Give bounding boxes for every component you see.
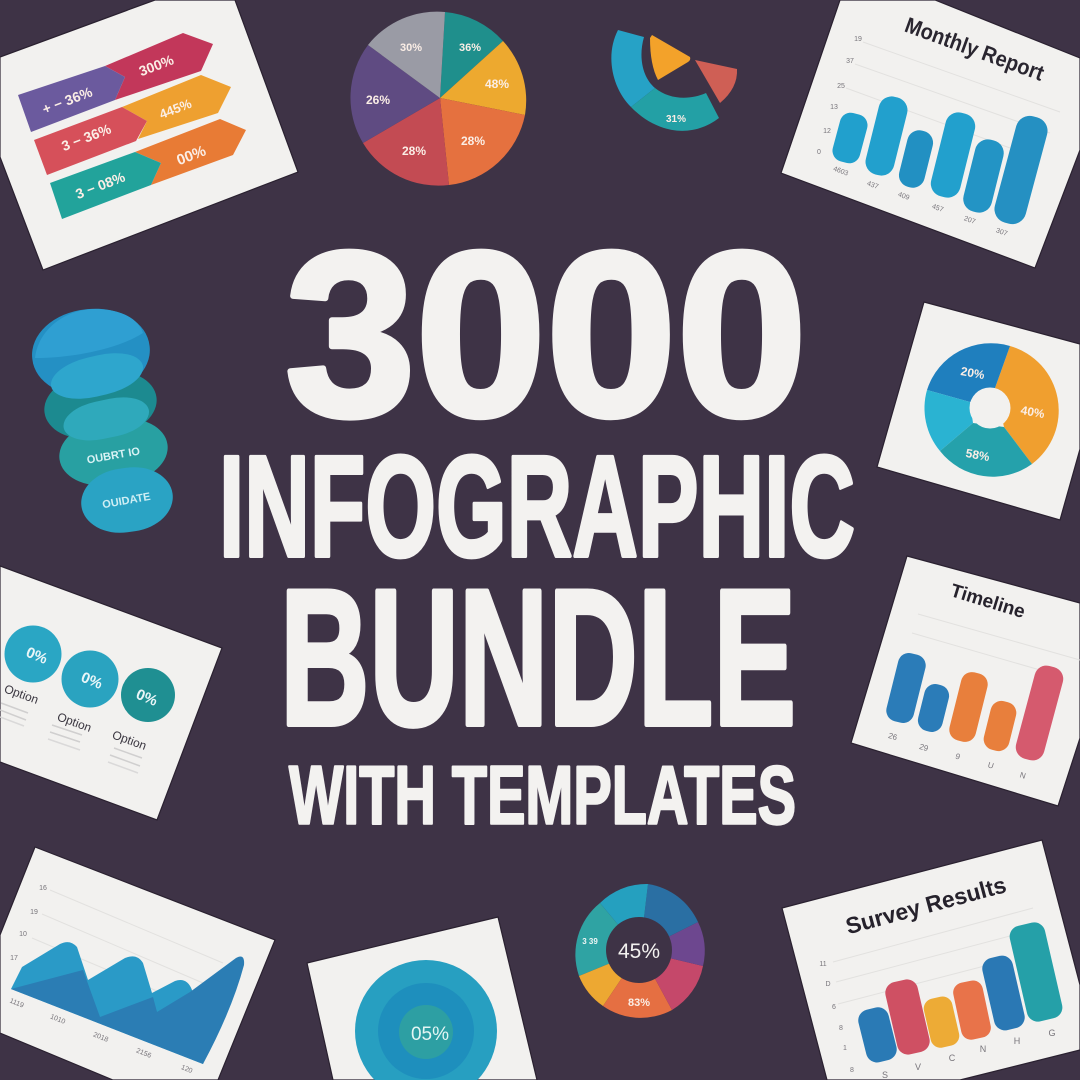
axis labels: D <box>825 981 831 988</box>
arrow row 3: 00% <box>174 142 208 169</box>
arrow row 3 <box>50 119 246 219</box>
arrow row 3: 3 − 08% <box>73 168 128 202</box>
heading: Timeline <box>948 580 1027 623</box>
axis labels: C <box>949 1053 956 1063</box>
axis labels: 11 <box>819 961 827 968</box>
axis labels: 0 <box>817 149 821 156</box>
stacked blob diagram left: OUIDATE <box>101 491 151 511</box>
panel: three option circles <box>0 566 222 820</box>
axis labels: N <box>980 1044 986 1054</box>
axis labels: N <box>1019 770 1027 781</box>
heading: Survey Results <box>843 871 1009 939</box>
donut chart bottom centre: 3 39 <box>582 937 598 946</box>
axis labels: 120 <box>180 1064 193 1075</box>
axis labels: U <box>987 760 995 771</box>
bars <box>830 94 1051 227</box>
heading: Monthly Report <box>902 12 1048 86</box>
axis labels <box>817 36 1008 238</box>
donut <box>924 343 1059 477</box>
pie chart top: 48% <box>485 77 509 91</box>
axis labels: 17 <box>10 955 18 962</box>
axis labels <box>887 731 1027 781</box>
option 3: Option <box>110 728 148 753</box>
exploded ring chart top <box>611 30 737 131</box>
arrow row 2: 445% <box>157 96 194 122</box>
axis labels: 8 <box>850 1067 854 1074</box>
panel: concentric circle bottom centre: 05% <box>411 1024 449 1045</box>
arrow row 1 <box>18 33 213 132</box>
axis labels: 1 <box>843 1045 847 1052</box>
axis labels: 13 <box>830 104 838 111</box>
axis labels: 207 <box>963 215 976 226</box>
title line: 3000: 3000 <box>285 203 807 465</box>
axis labels: 437 <box>866 180 879 191</box>
axis labels <box>9 885 193 1075</box>
axis labels: 6 <box>832 1004 836 1011</box>
stacked blob diagram left: OUBRT IO <box>86 445 141 467</box>
axis labels: 8 <box>839 1025 843 1032</box>
donut chart bottom centre: 83% <box>628 997 650 1009</box>
axis labels <box>819 961 1056 1080</box>
option 1: Option <box>2 682 40 707</box>
axis labels: 19 <box>854 36 862 43</box>
title line: BUNDLE: BUNDLE <box>280 550 796 766</box>
axis labels: G <box>1048 1028 1056 1038</box>
panel: donut chart right <box>877 302 1080 520</box>
axis labels: 307 <box>995 227 1008 238</box>
axis labels: 2156 <box>135 1047 152 1060</box>
axis labels: 29 <box>918 742 930 753</box>
axis labels: V <box>915 1062 921 1072</box>
panel: monthly report bar chart <box>781 0 1080 268</box>
panel: arrow list top left <box>0 0 298 270</box>
option 3 <box>108 668 175 773</box>
axis labels: 1119 <box>9 998 25 1010</box>
axis labels: 9 <box>954 752 962 762</box>
option 1: 0% <box>23 644 50 668</box>
title <box>219 203 855 842</box>
donut chart bottom centre <box>575 884 705 1018</box>
exploded ring chart top: 31% <box>666 114 686 125</box>
axis labels: 12 <box>823 128 831 135</box>
axis labels: 10 <box>19 931 27 938</box>
panel: timeline bar chart <box>851 556 1080 806</box>
pie chart top: 26% <box>366 93 390 107</box>
axis labels: 2018 <box>92 1031 109 1044</box>
arrow row 2 <box>34 75 231 175</box>
axis labels: S <box>882 1070 888 1080</box>
panel: survey results bar chart <box>782 840 1080 1080</box>
option 2 <box>48 650 118 750</box>
axis labels: 25 <box>837 83 845 90</box>
axis labels: 409 <box>897 191 910 202</box>
axis labels: 457 <box>931 203 944 214</box>
option 2: Option <box>55 710 93 735</box>
axis labels: 37 <box>846 58 854 65</box>
axis labels: 26 <box>887 731 899 742</box>
option 1 <box>0 626 62 726</box>
axis labels: 1010 <box>49 1013 66 1026</box>
title line: WITH TEMPLATES: WITH TEMPLATES <box>289 748 796 842</box>
bars <box>856 920 1065 1065</box>
bars <box>884 651 1066 763</box>
pie chart top: 28% <box>402 144 426 158</box>
donut: 58% <box>965 446 991 464</box>
donut: 20% <box>960 364 986 382</box>
axis labels: 16 <box>39 885 47 892</box>
donut chart bottom centre: 45% <box>618 940 660 963</box>
panel: concentric circle bottom centre <box>307 917 537 1080</box>
option 2: 0% <box>78 669 105 693</box>
pie chart top: 36% <box>459 42 481 54</box>
donut: 40% <box>1020 403 1046 421</box>
stacked blob diagram left <box>28 303 177 538</box>
arrow row 1: 300% <box>137 51 176 79</box>
panel: area chart bottom left <box>0 847 275 1080</box>
pie chart top <box>350 12 526 186</box>
arrow row 1: + − 36% <box>40 83 95 117</box>
axis labels: 4603 <box>832 166 849 178</box>
axis labels: H <box>1014 1036 1020 1046</box>
arrow row 2: 3 − 36% <box>59 120 114 154</box>
pie chart top: 28% <box>461 134 485 148</box>
option 3: 0% <box>133 686 160 710</box>
pie chart top: 30% <box>400 42 422 54</box>
axis labels: 19 <box>30 909 38 916</box>
area layers <box>11 942 244 1064</box>
